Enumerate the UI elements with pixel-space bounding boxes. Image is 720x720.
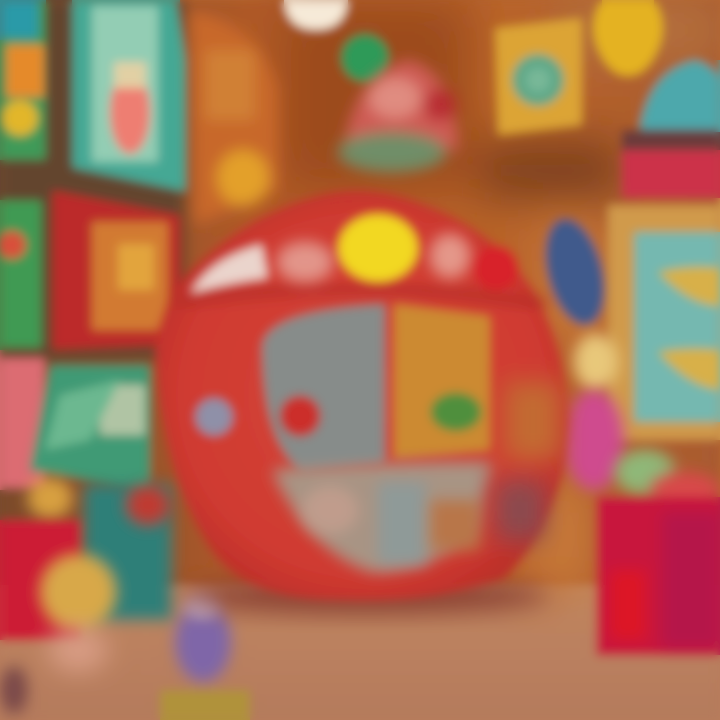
yellow dome light bbox=[338, 214, 418, 282]
red toy box bbox=[0, 520, 80, 640]
yellow framed picture bbox=[495, 18, 582, 135]
ball body bbox=[155, 190, 570, 601]
poster: green lower left bbox=[0, 200, 42, 348]
yellow base bbox=[160, 690, 250, 720]
panel: top centre toys bbox=[284, 0, 458, 172]
red knob on grey panel bbox=[280, 396, 320, 436]
right side panel bbox=[505, 382, 561, 460]
pale dome panel right bbox=[430, 234, 470, 278]
poster: orange arched card bbox=[190, 10, 278, 225]
grey round dial bbox=[195, 398, 233, 436]
dome seam bbox=[175, 288, 545, 305]
green poster bbox=[30, 365, 150, 490]
green ball bbox=[341, 34, 389, 82]
ball shadow bbox=[180, 578, 550, 614]
ceiling light bbox=[284, 0, 348, 30]
red dome knob bbox=[474, 246, 518, 290]
dark shelf bbox=[622, 130, 720, 152]
pink poster bbox=[0, 358, 45, 488]
panel: right framed picture bbox=[608, 205, 720, 440]
grey door panel bbox=[262, 304, 385, 470]
wall shading bbox=[280, 0, 720, 590]
blue oval toy bbox=[536, 213, 614, 331]
pink ball bbox=[564, 390, 624, 490]
yellow ball toy bbox=[40, 554, 116, 630]
green leaf mark bbox=[431, 393, 481, 431]
orange door panel bbox=[394, 304, 490, 458]
teal box bbox=[84, 484, 172, 620]
poster: teal card bbox=[72, 0, 186, 192]
panel: central red ball toy bbox=[155, 190, 570, 614]
white dome panel left bbox=[190, 244, 268, 294]
panel: top right wall bbox=[495, 0, 720, 198]
panel: right red box bbox=[597, 450, 720, 655]
red shelf band bbox=[622, 150, 720, 198]
purple figure bbox=[175, 602, 231, 682]
small hat toy bbox=[338, 60, 458, 172]
pink dome panel bbox=[277, 242, 333, 282]
teal dome bbox=[640, 60, 720, 140]
cream blob bbox=[574, 334, 618, 390]
panel: lower left toys bbox=[0, 358, 250, 720]
lower grey panel bbox=[272, 462, 492, 572]
panel: left wall posters bbox=[0, 0, 278, 360]
poster: top left colourful bbox=[0, 0, 46, 160]
poster: red card bbox=[52, 190, 180, 350]
wooden floor bbox=[0, 585, 720, 720]
yellow lantern bbox=[593, 0, 663, 76]
